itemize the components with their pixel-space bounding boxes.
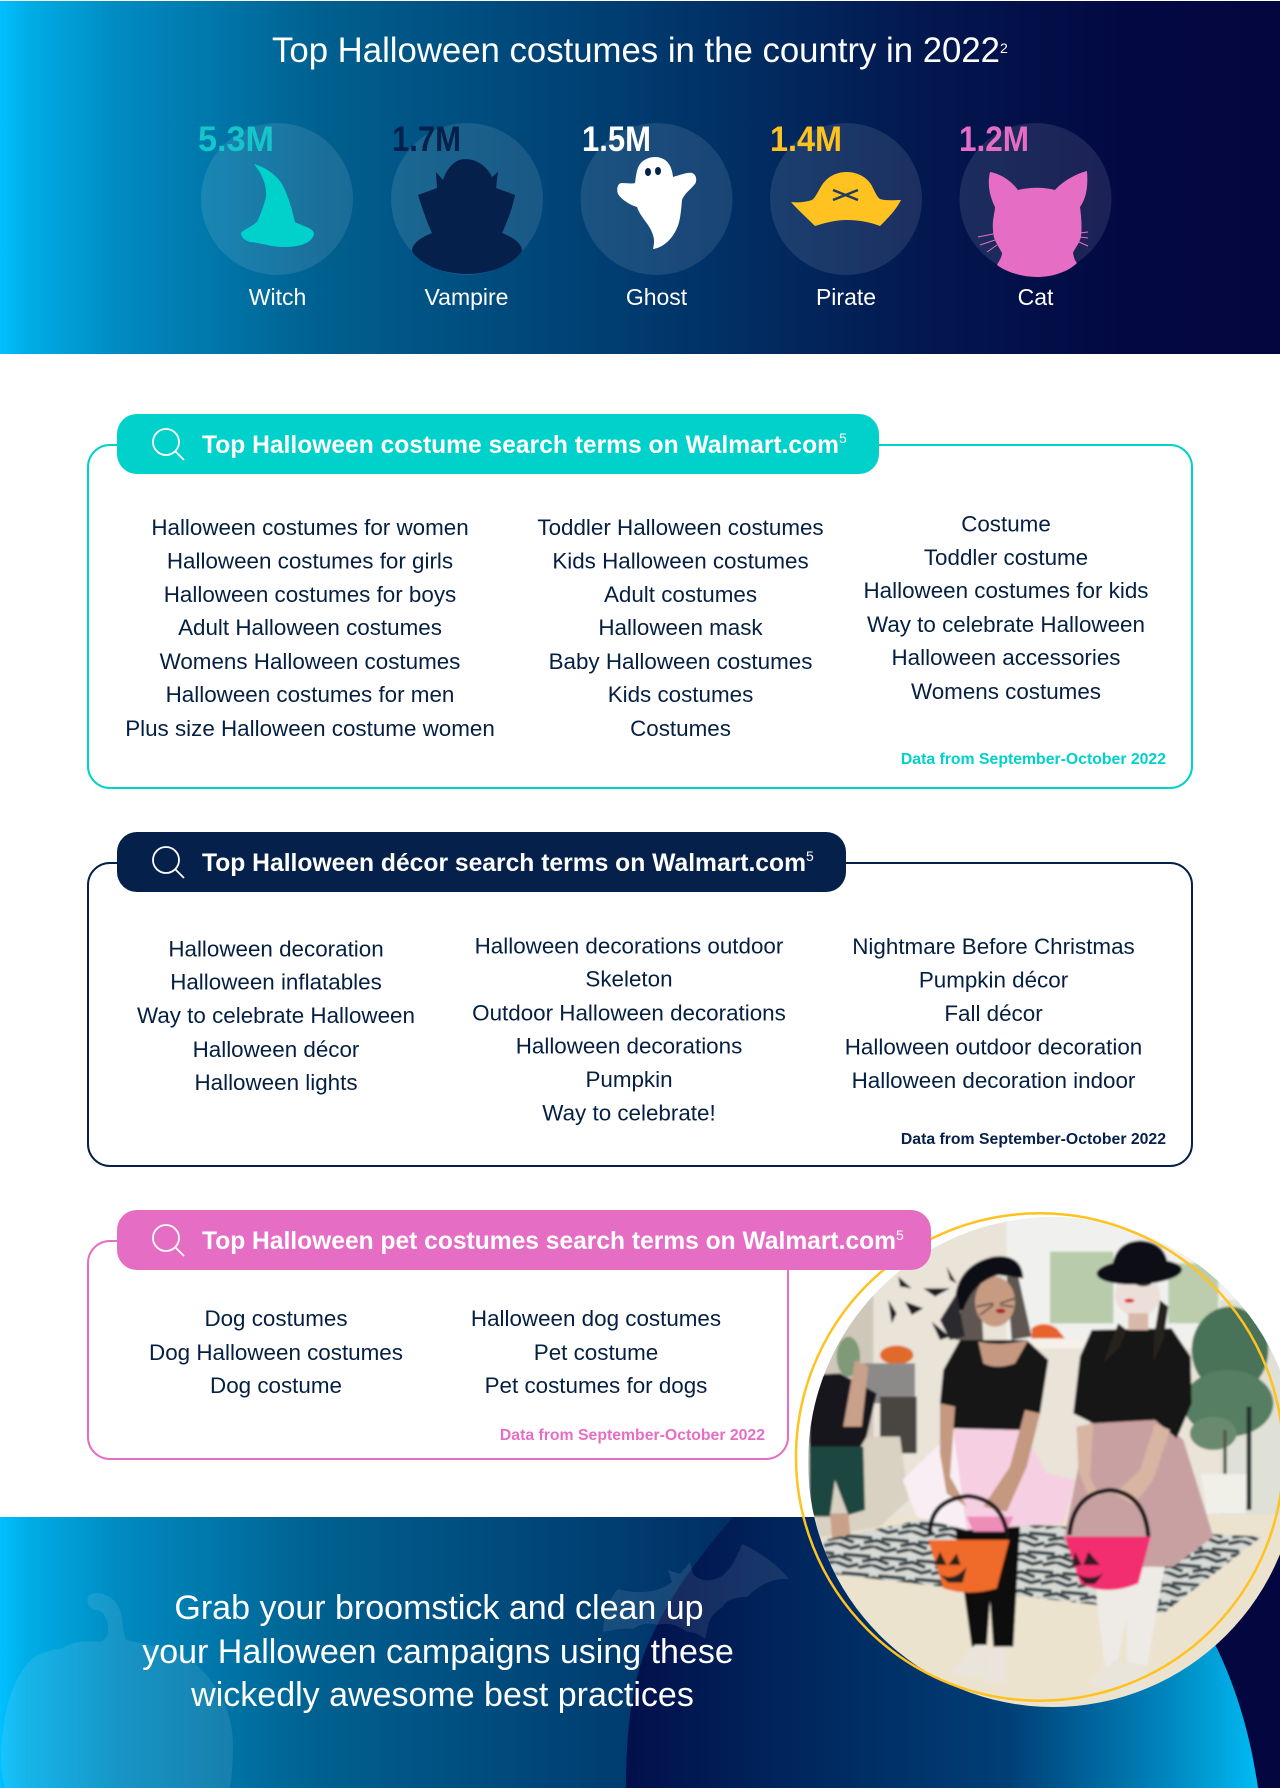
heading pill: costume search [117,414,879,474]
list: costume terms column 1: Halloween costumes for women [151,515,469,540]
list: decor terms column 1: Way to celebrate Halloween [137,1003,415,1028]
costume: witch [198,120,353,310]
list: pet terms column 2: Pet costumes for dogs [485,1373,707,1398]
costume: ghost: Ghost [626,284,688,310]
closing call to action: Grab your broomstick and clean up [174,1589,704,1627]
heading pill: pet search: Top Halloween pet costumes search terms on Walmart.com [202,1227,896,1255]
costume: pirate: Pirate [816,284,876,310]
list: decor terms column 2: Halloween decorations [516,1034,742,1058]
costume: pirate [770,120,922,310]
list: decor terms column 2: Halloween decorations outdoor [475,934,784,958]
list: decor terms column 2: Way to celebrate! [542,1100,716,1126]
heading pill: costume search: Top Halloween costume search terms on Walmart.com [202,431,839,459]
panel: decor search terms [88,832,1192,1166]
heading pill: decor search: Top Halloween décor search terms on Walmart.com [202,849,806,877]
title: Top Halloween costumes in the country in 2022 [272,31,1000,70]
list: costume terms column 1: Halloween costumes for girls [167,548,453,574]
heading pill: pet search: 5 [896,1227,904,1243]
list: decor terms column 2: Skeleton [585,966,673,992]
data note: decor: Data from September-October 2022 [901,1131,1166,1148]
list: pet terms column 1: Dog costume [210,1373,342,1398]
list: pet terms column 1 [149,1306,403,1398]
costume: witch: 5.3M [198,120,274,159]
heading pill: pet search [117,1210,931,1270]
heading pill: decor search: 5 [806,848,814,864]
list: costume terms column 2: Toddler Halloween costumes [537,515,824,540]
costume: vampire: 1.7M [392,120,461,159]
list: decor terms column 3 [845,934,1142,1093]
list: decor terms column 2: Pumpkin [585,1067,673,1092]
list: costume terms column 3 [864,512,1148,704]
list: costume terms column 2: Kids costumes [608,682,753,707]
list: decor terms column 3: Nightmare Before Christmas [852,934,1135,959]
list: costume terms column 1 [125,515,495,741]
list: decor terms column 2: Outdoor Halloween decorations [472,1000,786,1026]
list: pet terms column 2 [471,1306,721,1398]
title footnote: 2 [1000,40,1008,56]
list: decor terms column 3: Pumpkin décor [919,968,1069,992]
list: costume terms column 1: Halloween costumes for boys [164,582,456,607]
right girl [1097,1567,1165,1667]
list: decor terms column 3: Halloween outdoor decoration [845,1034,1142,1060]
list: decor terms column 1: Halloween décor [193,1037,360,1062]
top banner [0,1,1280,354]
list: costume terms column 3: Way to celebrate Halloween [867,612,1145,637]
bottom banner [0,1517,1280,1788]
panel: costume search terms [88,414,1192,788]
orange bucket [930,1496,1007,1537]
costume: vampire [391,120,543,310]
bats on wall [888,1267,957,1340]
list: pet terms column 1: Dog Halloween costumes [149,1340,403,1365]
list: costume terms column 2 [537,515,824,741]
list: costume terms column 3: Toddler costume [924,545,1088,570]
costume: ghost [580,120,732,310]
list: costume terms column 1: Adult Halloween costumes [178,615,442,640]
list: decor terms column 2 [472,934,786,1126]
list: decor terms column 1 [137,936,415,1095]
costume: cat: Cat [1018,284,1054,310]
list: decor terms column 1: Halloween decoration [168,936,384,962]
data note: costume: Data from September-October 2022 [901,751,1166,768]
list: costume terms column 1: Womens Halloween costumes [160,649,460,674]
costume: cat [959,120,1112,310]
list: costume terms column 2: Adult costumes [604,582,757,607]
list: decor terms column 3: Halloween decoration indoor [852,1068,1136,1093]
rug [823,1519,1262,1613]
icon: bat silhouette [603,1544,789,1639]
list: decor terms column 1: Halloween lights [194,1070,358,1095]
list: costume terms column 2: Costumes [630,716,731,741]
list: pet terms column 1: Dog costumes [204,1306,348,1331]
closing call to action: wickedly awesome best practices [190,1676,694,1714]
list: costume terms column 2: Baby Halloween costumes [549,649,812,674]
panel: pet costume search terms [88,1241,788,1459]
costume: cat: 1.2M [959,120,1029,159]
costume: ghost: 1.5M [582,120,651,159]
list: costume terms column 3: Costume [961,512,1051,536]
list: costume terms column 3: Womens costumes [911,679,1101,704]
heading pill: costume search: 5 [839,430,847,446]
decorative gold ring [796,1213,1280,1701]
data note: pet: Data from September-October 2022 [500,1427,765,1444]
list: pet terms column 2: Halloween dog costumes [471,1306,721,1331]
list: costume terms column 2: Kids Halloween costumes [552,548,809,574]
list: pet terms column 2: Pet costume [534,1340,658,1365]
left girl [955,1527,1020,1647]
seated woman and sofa [813,1437,908,1538]
decorative blue shape [626,1517,1258,1788]
costume: witch: Witch [249,284,306,310]
costume: pirate: 1.4M [770,120,842,159]
list: costume terms column 1: Halloween costumes for men [166,682,454,707]
list: decor terms column 3: Fall décor [944,1001,1043,1026]
list: costume terms column 3: Halloween accessories [892,645,1120,670]
list: costume terms column 2: Halloween mask [598,615,763,640]
costume: vampire: Vampire [425,284,508,310]
list: costume terms column 1: Plus size Halloween costume women [125,716,495,741]
heading pill: decor search [117,832,846,892]
icon: pumpkin silhouette [1,1593,233,1788]
closing call to action [142,1589,734,1714]
photo: two children in Halloween costumes [800,1210,1280,1715]
pink bucket [1069,1490,1148,1537]
list: costume terms column 3: Halloween costumes for kids [864,578,1148,603]
list: decor terms column 1: Halloween inflatables [170,970,382,994]
closing call to action: your Halloween campaigns using these [142,1633,734,1671]
